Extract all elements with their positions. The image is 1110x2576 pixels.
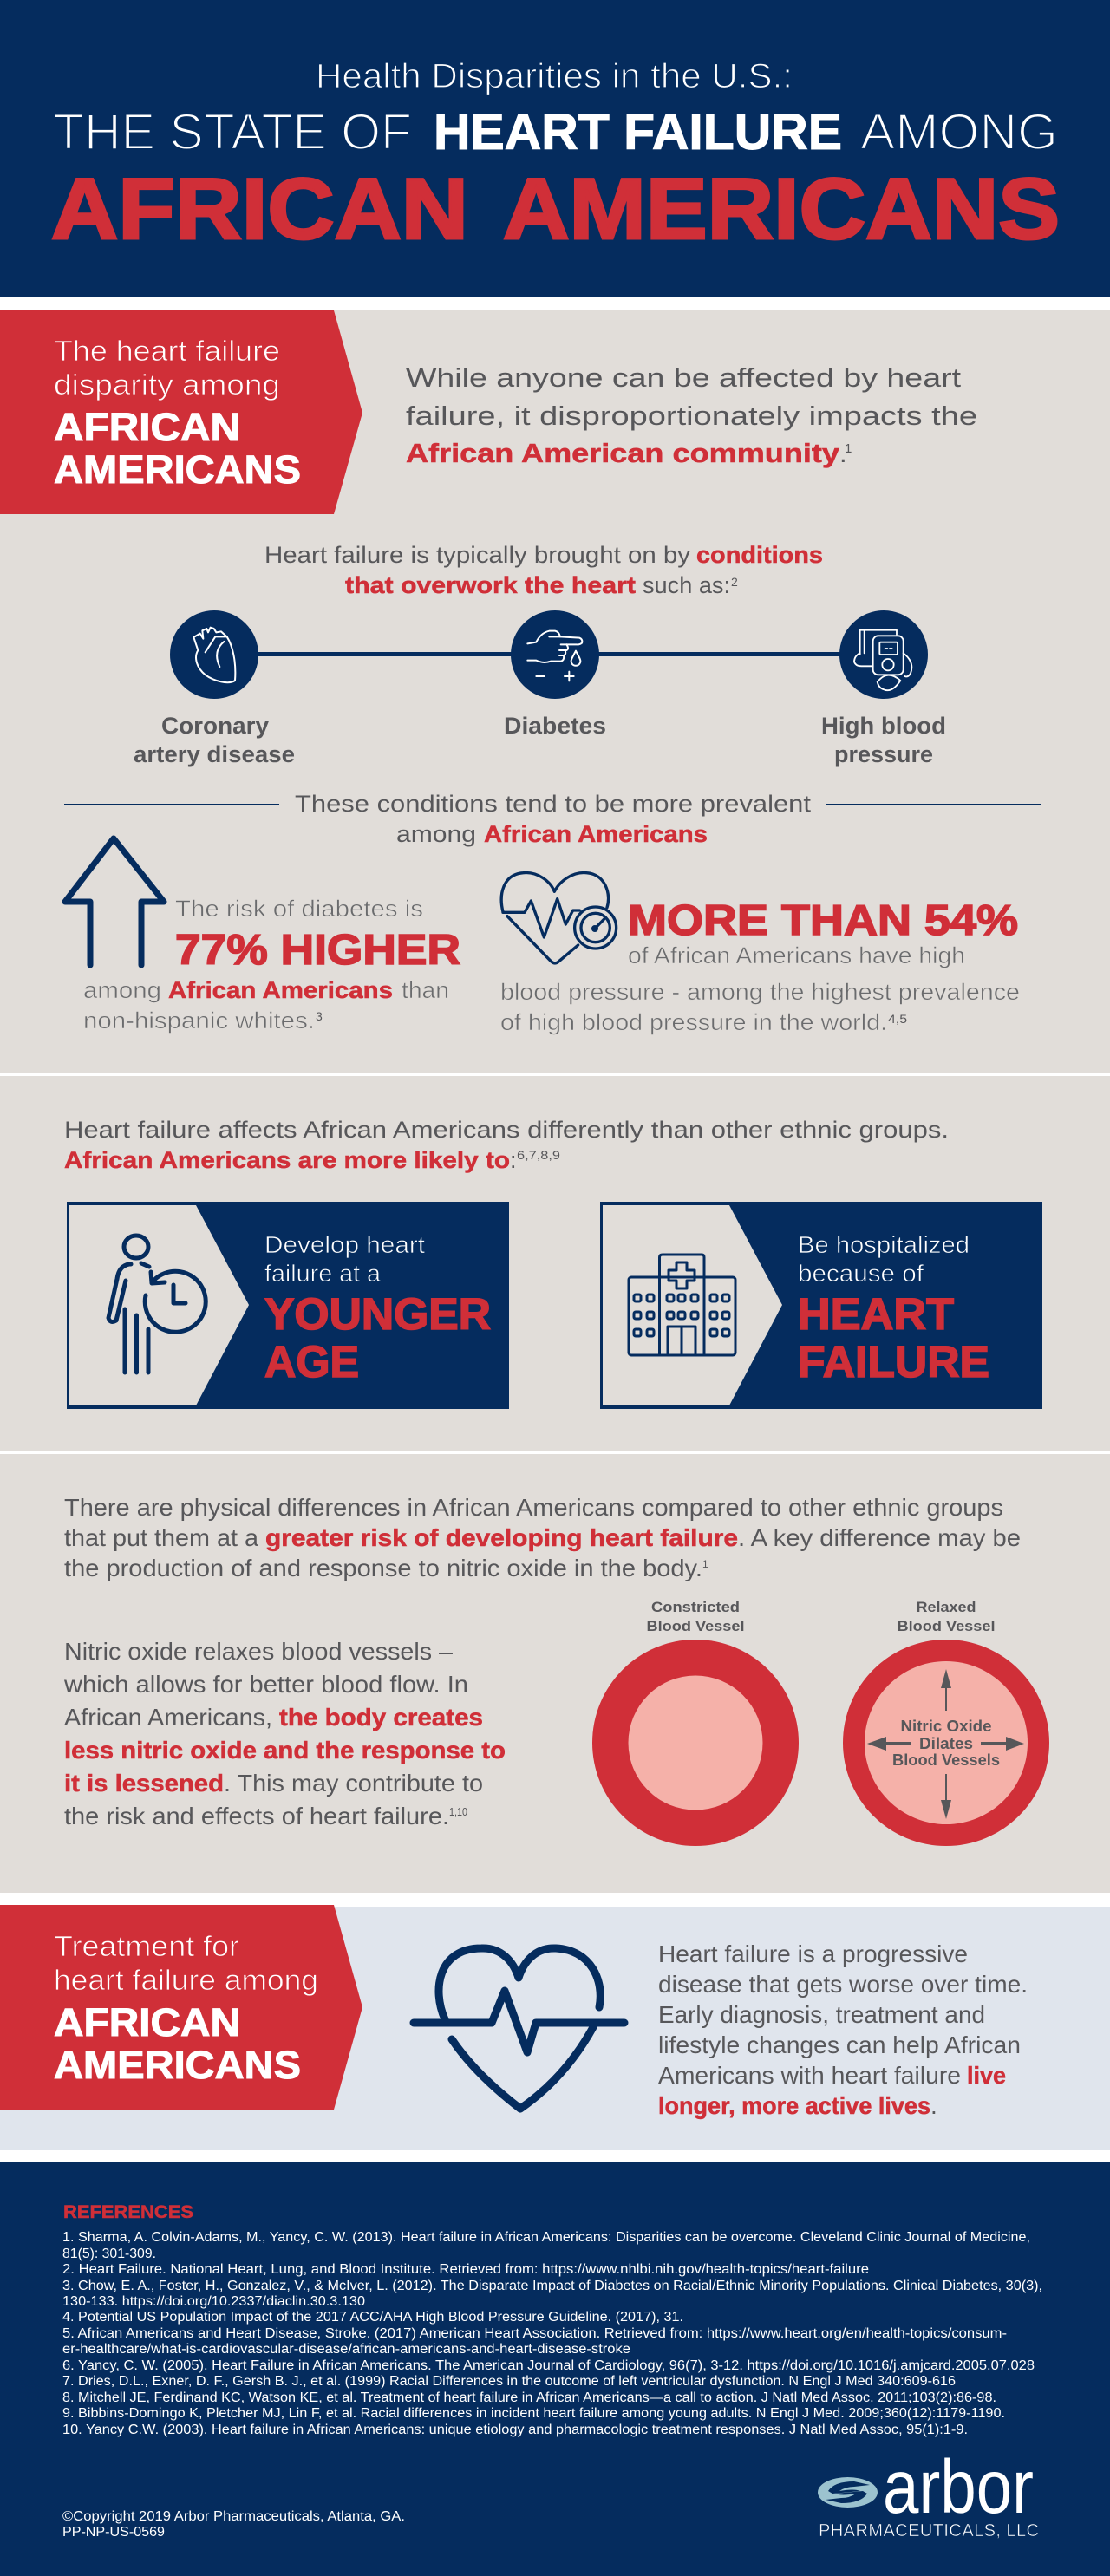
icon: up arrow bbox=[65, 838, 164, 965]
diagram: relaxed blood vessel: Blood Vessels bbox=[892, 1751, 1000, 1769]
banner: treatment: AFRICAN bbox=[54, 2000, 240, 2044]
icon: blood pressure monitor bbox=[839, 610, 928, 699]
title: the state of heart failure among: HEART FAILURE bbox=[434, 104, 842, 160]
stat: diabetes risk bbox=[83, 896, 460, 1034]
panel: conditions and prevalence bbox=[0, 310, 1110, 1073]
text: develop heart failure: AGE bbox=[264, 1337, 359, 1386]
text: disparity statement: 1 bbox=[845, 441, 852, 456]
banner: treatment bbox=[0, 1905, 362, 2110]
text: physical differences: 1 bbox=[702, 1558, 708, 1570]
banner: treatment: heart failure among bbox=[54, 1964, 318, 1996]
text: treatment message: longer, more active lives bbox=[658, 2092, 930, 2119]
diagram: constricted blood vessel bbox=[592, 1599, 799, 1846]
text: reference list: 7. Dries, D.L., Exner, D. F., Gersh B. J., et al. (1999) Racial Differences in the outcome of left ventricular dysfunction. N Engl J Med 340:609-616 bbox=[62, 2374, 956, 2389]
text: nitric oxide explanation: which allows for better blood flow. In bbox=[63, 1671, 468, 1698]
text: reference list: 9. Bibbins-Domingo K, Pletcher MJ, Lin F, et al. Racial differences in incident heart failure among young adults. N Engl J Med. 2009;360(12):1179-1190. bbox=[62, 2406, 1005, 2421]
card: younger age bbox=[67, 1202, 509, 1409]
text: nitric oxide explanation bbox=[63, 1638, 506, 1829]
diagram: relaxed blood vessel: Relaxed bbox=[916, 1599, 976, 1615]
title: African Americans bbox=[51, 160, 1060, 257]
text: nitric oxide explanation: it is lessened bbox=[64, 1770, 224, 1797]
stat: diabetes risk: non-hispanic whites. bbox=[83, 1008, 315, 1034]
text: reference list: er-healthcare/what-is-cardiovascular-disease/african-americans-and-heart-disease-stroke bbox=[62, 2342, 630, 2357]
label: high blood pressure bbox=[821, 713, 946, 767]
text: reference list: 4. Potential US Population Impact of the 2017 ACC/AHA High Blood Pressure Guideline. (2017), 31. bbox=[62, 2310, 683, 2325]
panel: treatment bbox=[0, 1905, 1110, 2150]
panel: more likely to bbox=[0, 1076, 1110, 1451]
stat: high blood pressure: 4,5 bbox=[888, 1012, 907, 1026]
text: nitric oxide explanation: 1,10 bbox=[449, 1805, 467, 1818]
text: prevalence heading: among bbox=[396, 821, 476, 847]
connector line bbox=[214, 652, 884, 656]
text: conditions intro: Heart failure is typically brought on by bbox=[264, 542, 691, 568]
label: diabetes: Diabetes bbox=[504, 713, 606, 739]
text: physical differences bbox=[64, 1494, 1021, 1581]
diagram: relaxed blood vessel: Nitric Oxide bbox=[900, 1718, 992, 1735]
icon: diabetes finger bbox=[511, 610, 599, 699]
panel: references footer bbox=[0, 2162, 1110, 2576]
text: nitric oxide explanation: . This may contribute to bbox=[224, 1770, 483, 1797]
icon: heart bbox=[170, 610, 258, 699]
text: treatment message: disease that gets worse over time. bbox=[658, 1971, 1028, 1998]
text: copyright: ©Copyright 2019 Arbor Pharmaceuticals, Atlanta, GA. bbox=[62, 2509, 405, 2524]
text: reference list: 3. Chow, E. A., Foster, H., Gonzalez, V., & McIver, L. (2012). The Disparate Impact of Diabetes on Racial/Ethnic Minority Populations. Clinical Diabetes, 30(3), bbox=[62, 2279, 1042, 2293]
text: conditions intro: such as: bbox=[643, 572, 730, 598]
stat: high blood pressure: of African Americans have high bbox=[628, 942, 965, 968]
text: physical differences: that put them at a bbox=[64, 1524, 258, 1551]
diagram: relaxed blood vessel bbox=[843, 1599, 1049, 1846]
text: develop heart failure: Develop heart bbox=[264, 1231, 425, 1258]
logo: Arbor Pharmaceuticals bbox=[818, 2445, 1039, 2540]
text: conditions intro bbox=[264, 542, 823, 598]
stat: diabetes risk: 77% HIGHER bbox=[175, 927, 460, 974]
banner: heart failure disparity: AFRICAN bbox=[54, 405, 240, 449]
text: disparity statement: While anyone can be affected by heart bbox=[406, 362, 961, 393]
text: conditions intro: 2 bbox=[731, 575, 738, 589]
panel: header bbox=[0, 0, 1110, 297]
text: physical differences: the production of and response to nitric oxide in the body. bbox=[64, 1555, 702, 1581]
panel: nitric oxide bbox=[0, 1454, 1110, 1893]
text: reference list: 1. Sharma, A. Colvin-Adams, M., Yancy, C. W. (2013). Heart failure in African Americans: Disparities can be overcome. Cleveland Clinic Journal of Medicine, bbox=[62, 2230, 1030, 2245]
text: be hospitalized: HEART bbox=[798, 1289, 954, 1339]
stat: diabetes risk: African Americans bbox=[168, 977, 393, 1003]
text: be hospitalized: because of bbox=[798, 1260, 924, 1287]
stat: high blood pressure: of high blood pressure in the world. bbox=[500, 1009, 887, 1035]
text: disparity statement bbox=[406, 362, 977, 468]
logo: Arbor Pharmaceuticals: arbor bbox=[883, 2445, 1034, 2529]
text: disparity statement: African American community bbox=[406, 438, 840, 468]
text: treatment message: lifestyle changes can help African bbox=[658, 2031, 1021, 2058]
text: physical differences: greater risk of developing heart failure bbox=[265, 1524, 738, 1551]
diagram: relaxed blood vessel: Blood Vessel bbox=[897, 1618, 996, 1634]
icon: heart with pulse bbox=[414, 1948, 624, 2109]
text: reference list bbox=[62, 2230, 1042, 2437]
text: reference list: 2. Heart Failure. National Heart, Lung, and Blood Institute. Retrieved from: https://www.nhlbi.nih.gov/health-topics/heart-failure bbox=[62, 2262, 869, 2277]
stat: high blood pressure bbox=[500, 897, 1020, 1035]
text: section intro: 6,7,8,9 bbox=[517, 1148, 560, 1162]
title: subtitle line: Health Disparities in the U.S.: bbox=[316, 57, 793, 95]
text: section intro: African Americans are more likely to bbox=[64, 1147, 510, 1173]
banner: heart failure disparity: AMERICANS bbox=[54, 447, 301, 492]
label: coronary artery disease bbox=[134, 713, 295, 767]
text: be hospitalized bbox=[798, 1231, 989, 1386]
label: high blood pressure: pressure bbox=[834, 741, 933, 767]
stat: diabetes risk: 3 bbox=[316, 1009, 323, 1023]
text: section intro: Heart failure affects African Americans differently than other ethnic groups. bbox=[64, 1117, 949, 1143]
text: copyright bbox=[62, 2509, 405, 2540]
banner: heart failure disparity bbox=[0, 310, 362, 514]
text: reference list: 10. Yancy C.W. (2003). Heart failure in African Americans: unique etiology and pharmacologic treatment responses. J Natl Med Assoc, 95(1):1-9. bbox=[62, 2423, 968, 2437]
arrows: dilation bbox=[867, 1669, 1024, 1819]
label: coronary artery disease: Coronary bbox=[161, 713, 269, 739]
banner: treatment: Treatment for bbox=[54, 1930, 239, 1962]
text: develop heart failure: failure at a bbox=[264, 1260, 381, 1287]
stat: high blood pressure: blood pressure - among the highest prevalence bbox=[500, 979, 1020, 1005]
stat: diabetes risk: among bbox=[83, 977, 161, 1003]
text: prevalence heading bbox=[295, 791, 812, 847]
text: treatment message: . bbox=[930, 2092, 937, 2119]
label: high blood pressure: High blood bbox=[821, 713, 946, 739]
text: develop heart failure bbox=[264, 1231, 491, 1386]
text: reference list: 5. African Americans and Heart Disease, Stroke. (2017) American Heart Association. Retrieved from: https://www.heart.org/en/health-topics/consum- bbox=[62, 2326, 1007, 2341]
text: prevalence heading: African Americans bbox=[484, 821, 708, 847]
diagram: constricted blood vessel: Constricted bbox=[651, 1599, 740, 1615]
diagram: constricted blood vessel: Blood Vessel bbox=[647, 1618, 744, 1634]
text: treatment message: Early diagnosis, treatment and bbox=[658, 2001, 985, 2028]
text: reference list: 8. Mitchell JE, Ferdinand KC, Watson KE, et al. Treatment of heart failure in African Americans—a call to action. J Natl Med Assoc. 2011;103(2):86-98. bbox=[62, 2390, 996, 2405]
text: treatment message: Heart failure is a progressive bbox=[658, 1940, 968, 1967]
icon: person with clock bbox=[108, 1236, 206, 1373]
text: reference list: 130-133. https://doi.org/10.2337/diaclin.30.3.130 bbox=[62, 2294, 365, 2309]
icon: hospital bbox=[629, 1255, 735, 1355]
text: physical differences: There are physical differences in African Americans compared to other ethnic groups bbox=[64, 1494, 1003, 1521]
text: conditions intro: conditions bbox=[696, 542, 823, 568]
text: conditions intro: that overwork the heart bbox=[345, 572, 636, 598]
text: disparity statement: . bbox=[839, 438, 847, 468]
text: be hospitalized: Be hospitalized bbox=[798, 1231, 970, 1258]
text: copyright: PP-NP-US-0569 bbox=[62, 2525, 165, 2540]
stat: diabetes risk: The risk of diabetes is bbox=[175, 896, 423, 922]
title: the state of heart failure among: THE STATE OF bbox=[53, 104, 412, 160]
text: nitric oxide explanation: less nitric oxide and the response to bbox=[64, 1737, 506, 1764]
text: prevalence heading: These conditions tend to be more prevalent bbox=[295, 791, 812, 817]
text: nitric oxide explanation: the body creates bbox=[279, 1704, 483, 1731]
title: the state of heart failure among bbox=[53, 104, 1058, 160]
title: African Americans: AFRICAN bbox=[51, 160, 468, 257]
diagram: relaxed blood vessel: Dilates bbox=[919, 1735, 973, 1752]
banner: heart failure disparity: The heart failure bbox=[54, 335, 280, 367]
stat: diabetes risk: than bbox=[402, 977, 449, 1003]
text: section intro: : bbox=[510, 1147, 517, 1173]
banner: heart failure disparity: disparity among bbox=[54, 368, 280, 401]
heading: references: REFERENCES bbox=[63, 2202, 193, 2222]
banner: treatment: AMERICANS bbox=[54, 2043, 301, 2087]
text: section intro bbox=[64, 1117, 949, 1173]
text: treatment message: Americans with heart failure bbox=[658, 2062, 961, 2089]
text: physical differences: . A key difference may be bbox=[738, 1524, 1021, 1551]
text: develop heart failure: YOUNGER bbox=[264, 1289, 491, 1339]
text: nitric oxide explanation: the risk and effects of heart failure. bbox=[64, 1803, 449, 1829]
title: African Americans: AMERICANS bbox=[503, 160, 1060, 257]
card: hospitalized bbox=[600, 1202, 1042, 1409]
logo: Arbor Pharmaceuticals: PHARMACEUTICALS, LLC bbox=[819, 2521, 1039, 2540]
title: the state of heart failure among: AMONG bbox=[860, 104, 1058, 160]
icon: heart with gauge bbox=[501, 873, 617, 963]
text: disparity statement: failure, it disproportionately impacts the bbox=[406, 401, 977, 431]
stat: high blood pressure: MORE THAN 54% bbox=[628, 897, 1018, 944]
text: treatment message: live bbox=[967, 2062, 1006, 2089]
text: reference list: 6. Yancy, C. W. (2005). Heart Failure in African Americans. The American Journal of Cardiology, 96(7), 3-12. https://doi.org/10.1016/j.amjcard.2005.07.028 bbox=[62, 2358, 1035, 2373]
label: coronary artery disease: artery disease bbox=[134, 741, 295, 767]
text: treatment message bbox=[658, 1940, 1028, 2119]
text: be hospitalized: FAILURE bbox=[798, 1337, 989, 1386]
text: nitric oxide explanation: Nitric oxide relaxes blood vessels – bbox=[64, 1638, 453, 1665]
text: reference list: 81(5): 301-309. bbox=[62, 2247, 156, 2261]
text: nitric oxide explanation: African Americans, bbox=[64, 1704, 272, 1731]
